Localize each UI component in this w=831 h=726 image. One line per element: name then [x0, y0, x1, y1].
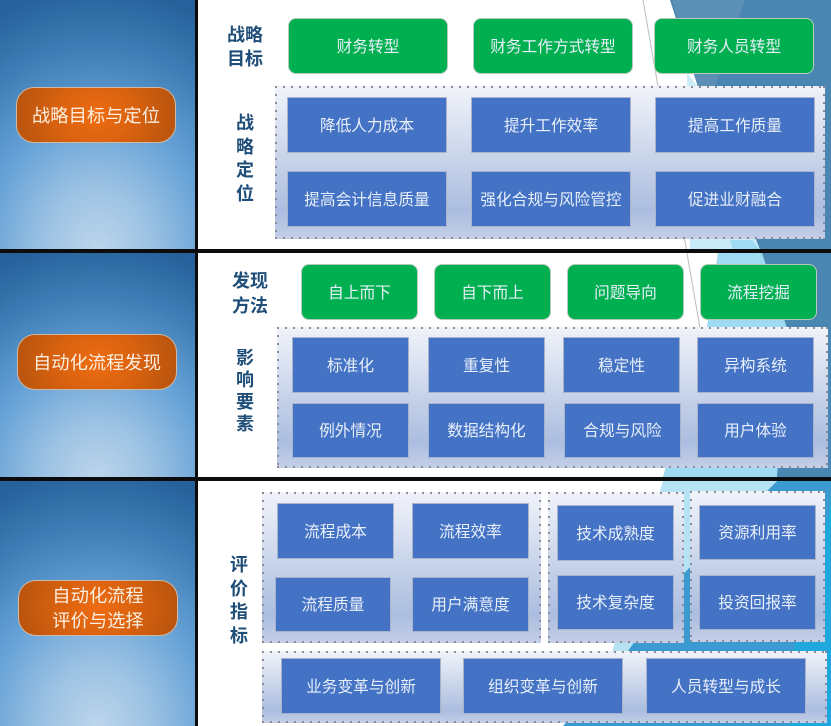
horizontal divider one	[0, 249, 831, 253]
method: process mining	[700, 264, 817, 320]
heading: evaluation indicators: 评价指标	[230, 555, 248, 646]
heading: influencing factors: 响	[236, 370, 254, 390]
item: stability	[563, 337, 680, 393]
item: strengthen compliance and risk control	[471, 171, 631, 227]
item: personnel transformation and growth	[646, 658, 806, 714]
item: improve work quality	[655, 97, 815, 153]
item: improve accounting information quality	[287, 171, 447, 227]
heading: discovery methods: 发现	[232, 271, 268, 291]
method: top down	[301, 264, 418, 320]
pill: automation process evaluation and selection	[18, 580, 178, 636]
left band: strategy	[0, 0, 195, 250]
method: bottom up	[434, 264, 551, 320]
heading: influencing factors: 影	[236, 348, 254, 368]
heading: discovery methods	[232, 271, 268, 316]
item: process efficiency: 流程效率	[439, 524, 502, 540]
item: compliance and risk: 合规与风险	[583, 423, 662, 440]
green row: discovery methods	[301, 264, 817, 320]
item: raise work efficiency: 提升工作效率	[504, 118, 598, 134]
item: user experience	[697, 403, 814, 458]
item: promote business-finance integration: 促进业财融合	[688, 192, 782, 208]
heading: strategic positioning: 战略定位	[236, 113, 254, 204]
item: raise work efficiency	[471, 97, 631, 153]
heading: strategic goals: 目标	[227, 49, 263, 69]
pill: automation process discovery	[17, 334, 177, 390]
panel: resource indicators	[690, 491, 825, 642]
item: process quality: 流程质量	[302, 597, 364, 614]
panel: process indicators	[262, 492, 541, 643]
item: strengthen compliance and risk control: 强化合规与风险管控	[480, 192, 622, 208]
goal: working style transformation	[473, 18, 633, 74]
item: heterogeneous systems: 异构系统	[724, 358, 787, 374]
item: user satisfaction: 用户满意度	[431, 597, 510, 614]
item: technology maturity	[557, 505, 674, 561]
pill: automation process evaluation and selection: 自动化流程	[52, 585, 144, 606]
item: process efficiency	[412, 503, 529, 559]
method: bottom up: 自下而上	[461, 284, 524, 302]
item: improve accounting information quality: 提高会计信息质量	[304, 192, 430, 208]
item: standardization: 标准化	[327, 358, 374, 374]
method: process mining: 流程挖掘	[727, 284, 790, 302]
left band: discovery	[0, 253, 195, 478]
item: process cost: 流程成本	[304, 524, 367, 540]
item: data structuring: 数据结构化	[447, 423, 526, 440]
goal: finance transformation: 财务转型	[337, 38, 399, 56]
item: standardization	[292, 337, 409, 393]
item: reduce labour cost: 降低人力成本	[320, 118, 414, 134]
heading: discovery methods: 方法	[232, 296, 268, 316]
item: compliance and risk	[564, 403, 681, 458]
pill: automation process discovery: 自动化流程发现	[33, 352, 161, 372]
pill: automation process evaluation and selection: 评价与选择	[52, 610, 144, 631]
panel: technology indicators	[548, 492, 684, 643]
item: resource utilization: 资源利用率	[718, 525, 797, 542]
item: repetitiveness: 重复性	[463, 358, 510, 374]
item: organizational change and innovation: 组织变革与创新	[488, 678, 598, 696]
goal: working style transformation: 财务工作方式转型	[490, 38, 616, 56]
panel: transformation indicators	[262, 651, 827, 723]
item: return on investment: 投资回报率	[718, 595, 797, 612]
item: technical complexity: 技术复杂度	[576, 595, 655, 612]
item: personnel transformation and growth: 人员转型与成长	[671, 678, 781, 696]
item: organizational change and innovation	[463, 658, 623, 714]
heading: influencing factors: 要	[236, 392, 254, 412]
item: technology maturity: 技术成熟度	[576, 526, 655, 542]
left band: evaluation	[0, 481, 195, 726]
item: promote business-finance integration	[655, 171, 815, 227]
vertical divider	[195, 0, 198, 726]
goal: finance transformation	[288, 18, 448, 74]
item: process quality	[275, 577, 391, 632]
horizontal divider two	[0, 477, 831, 481]
goal: personnel transformation	[654, 18, 814, 74]
item: improve work quality: 提高工作质量	[688, 118, 782, 134]
item: exceptions: 例外情况	[319, 423, 382, 440]
green row: strategic goals	[288, 18, 814, 74]
item: technical complexity	[557, 575, 674, 630]
method: problem oriented	[567, 264, 684, 320]
panel: influencing factors	[277, 327, 828, 468]
item: reduce labour cost	[287, 97, 447, 153]
item: resource utilization	[699, 505, 816, 560]
heading: influencing factors	[236, 348, 254, 434]
item: heterogeneous systems	[697, 337, 814, 393]
item: return on investment	[699, 575, 816, 630]
pill: strategic goals and positioning	[16, 87, 176, 143]
pill: strategic goals and positioning: 战略目标与定位	[32, 104, 160, 126]
heading: strategic goals: 战略	[227, 25, 263, 45]
item: repetitiveness	[428, 337, 545, 393]
item: stability: 稳定性	[598, 358, 645, 374]
goal: personnel transformation: 财务人员转型	[687, 38, 781, 56]
item: exceptions	[292, 403, 409, 458]
item: business change and innovation: 业务变革与创新	[306, 678, 416, 696]
method: top down: 自上而下	[328, 284, 391, 302]
heading: strategic goals	[227, 25, 263, 69]
item: data structuring	[428, 403, 545, 458]
method: problem oriented: 问题导向	[594, 284, 657, 302]
item: process cost	[277, 503, 394, 559]
item: user satisfaction	[412, 577, 529, 632]
heading: influencing factors: 素	[236, 414, 254, 434]
item: user experience: 用户体验	[724, 423, 787, 440]
item: business change and innovation	[281, 658, 441, 714]
panel: strategic positioning	[275, 86, 825, 239]
